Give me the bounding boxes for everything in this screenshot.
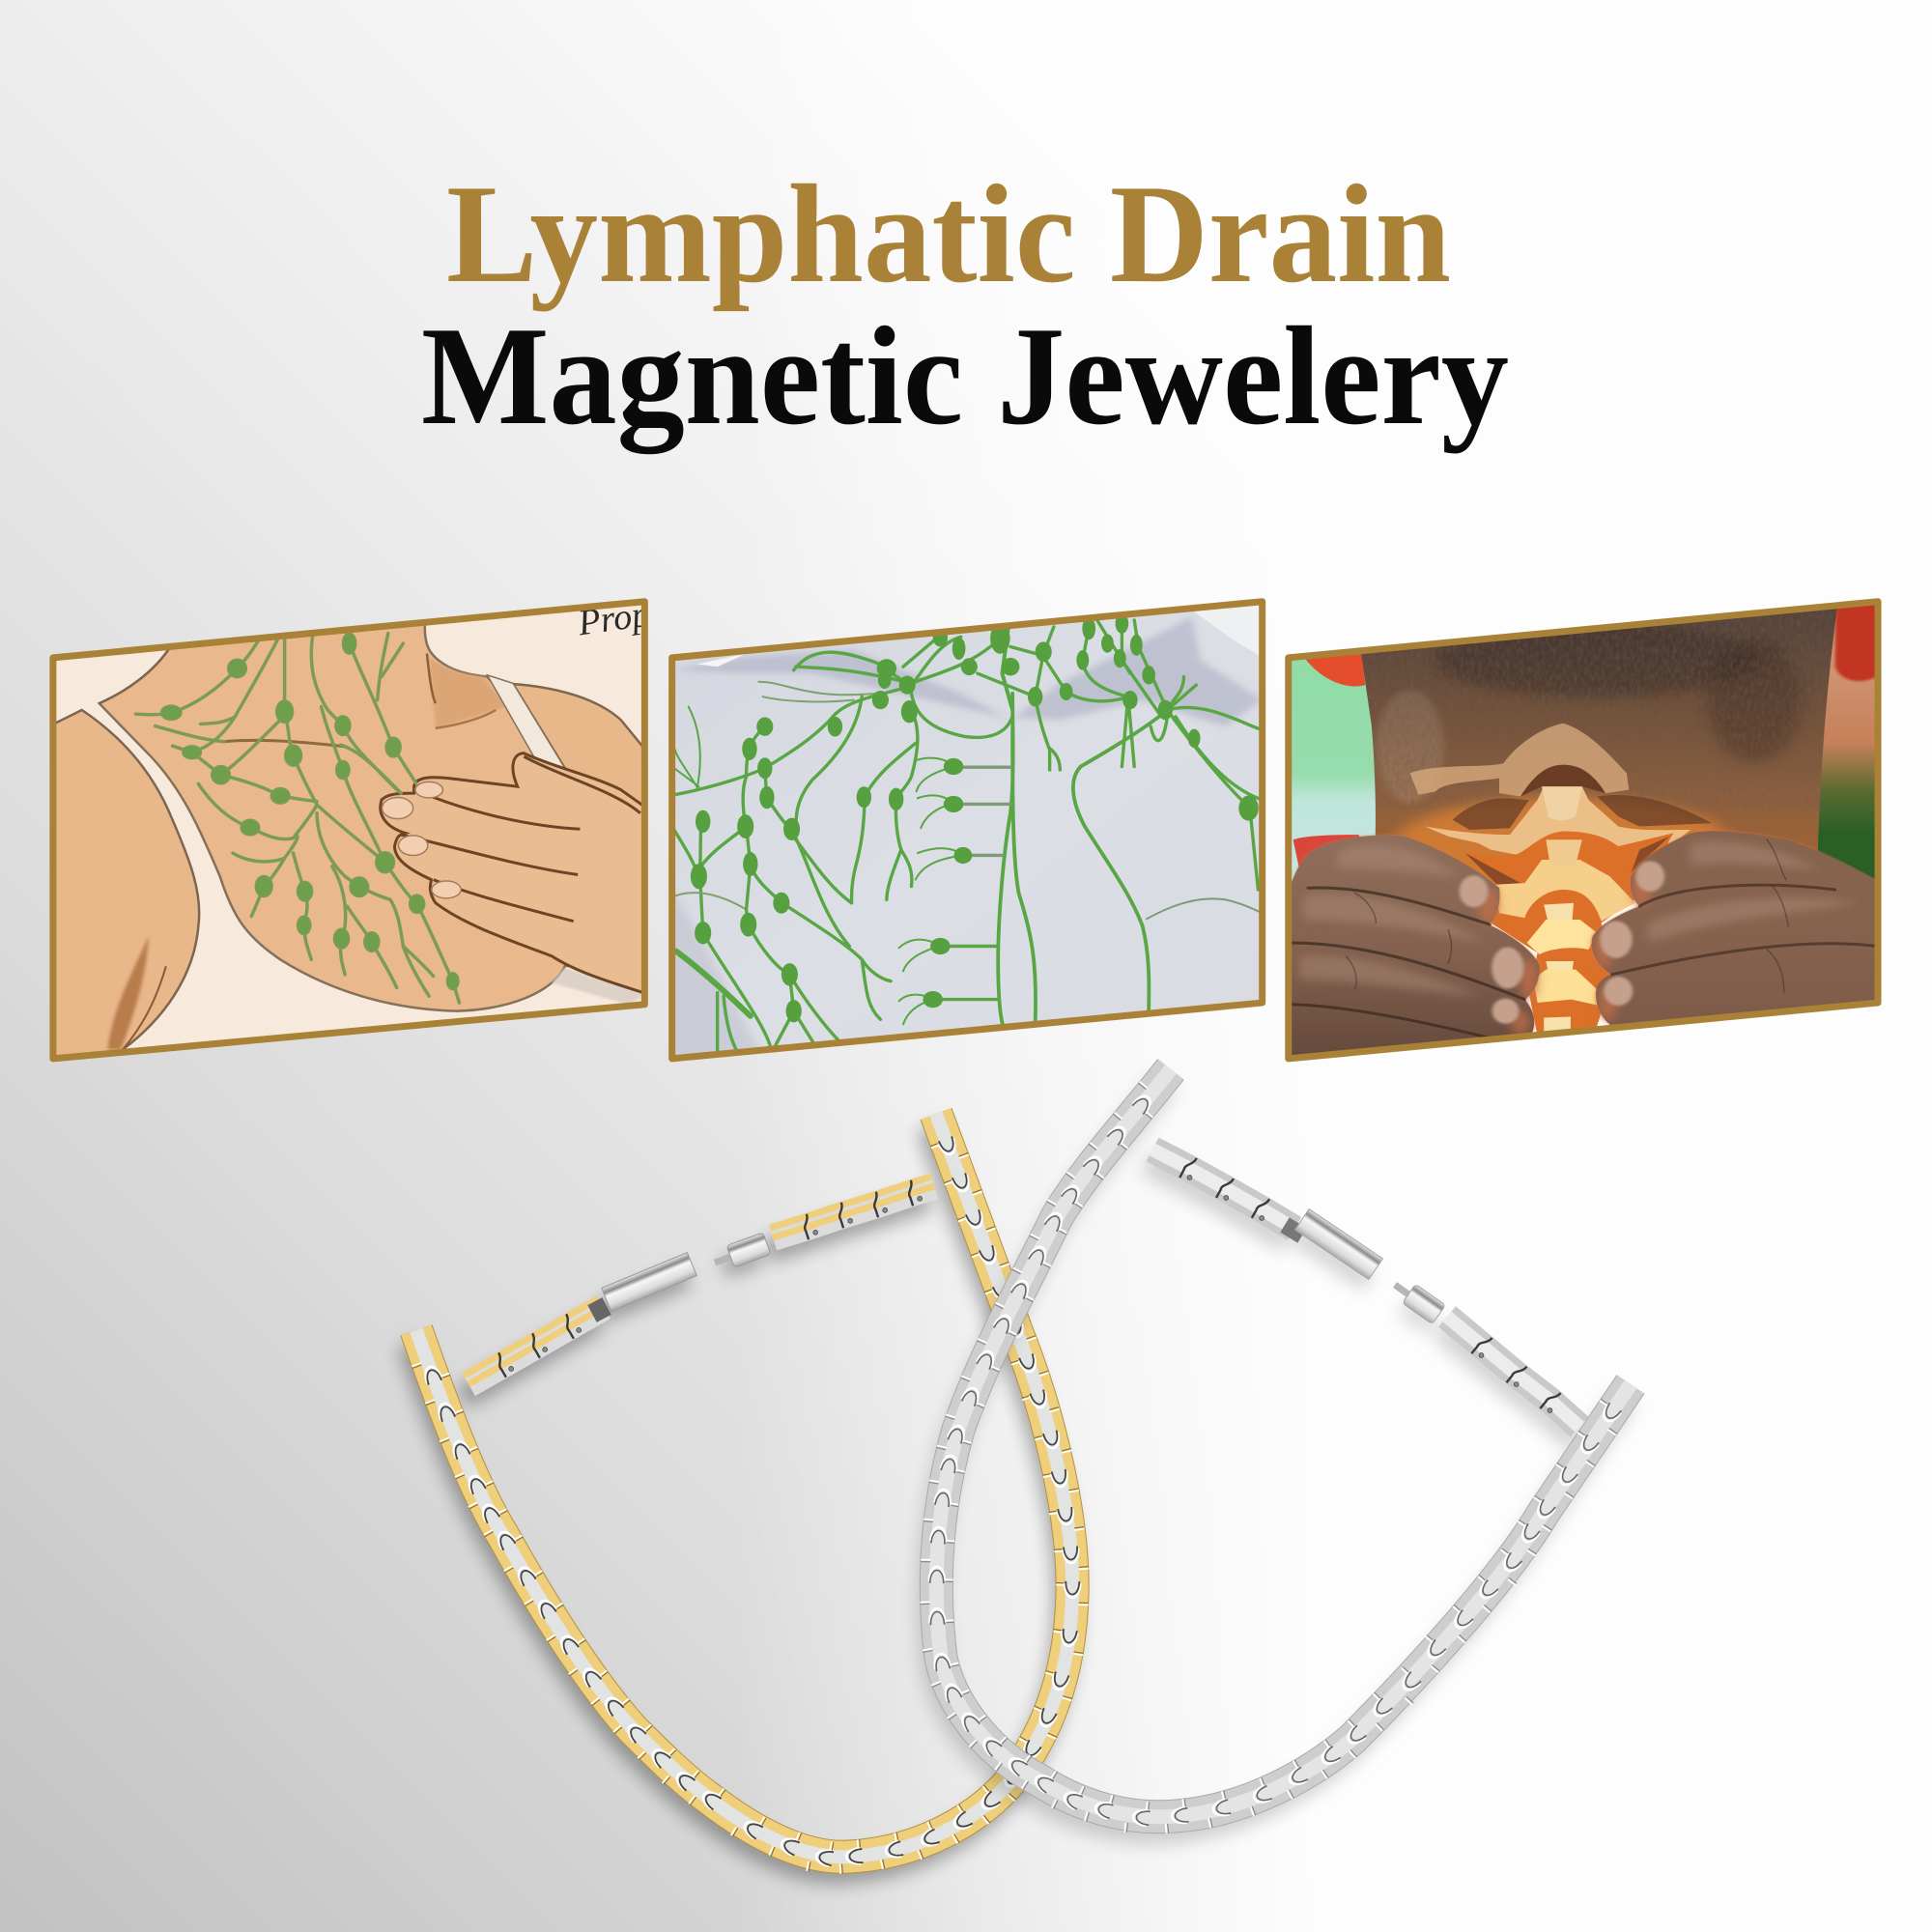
title bbox=[421, 156, 1509, 454]
title line: Magnetic Jewelery: Magnetic Jewelery bbox=[421, 298, 1509, 454]
silver necklace shadows bbox=[930, 1083, 1625, 1831]
panel: lymphatic system diagram on torso bbox=[664, 593, 1270, 1065]
gold necklace chain bbox=[416, 1114, 1072, 1857]
title line: Lymphatic Drain: Lymphatic Drain bbox=[446, 156, 1451, 312]
gold necklace clasp pin and bar section bbox=[715, 1177, 934, 1267]
silver necklace clasp side: bar section and magnetic tube bbox=[1152, 1150, 1382, 1280]
silver necklace chain bbox=[936, 1069, 1631, 1817]
panel: photo of hands pressing glowing neck spine bbox=[1283, 593, 1886, 1065]
silver necklace clasp pin and bar section bbox=[1395, 1284, 1579, 1427]
necklace shadows bbox=[411, 1127, 1066, 1870]
silver magnetic necklace bbox=[936, 1069, 1631, 1817]
panel: illustration of lymph drainage massage on chest bbox=[43, 589, 683, 1065]
gold necklace clasp side: bar section and magnetic tube bbox=[464, 1253, 696, 1384]
gold and silver magnetic necklace bbox=[416, 1114, 1072, 1857]
handwritten caption fragment: Proper bbox=[575, 589, 683, 644]
